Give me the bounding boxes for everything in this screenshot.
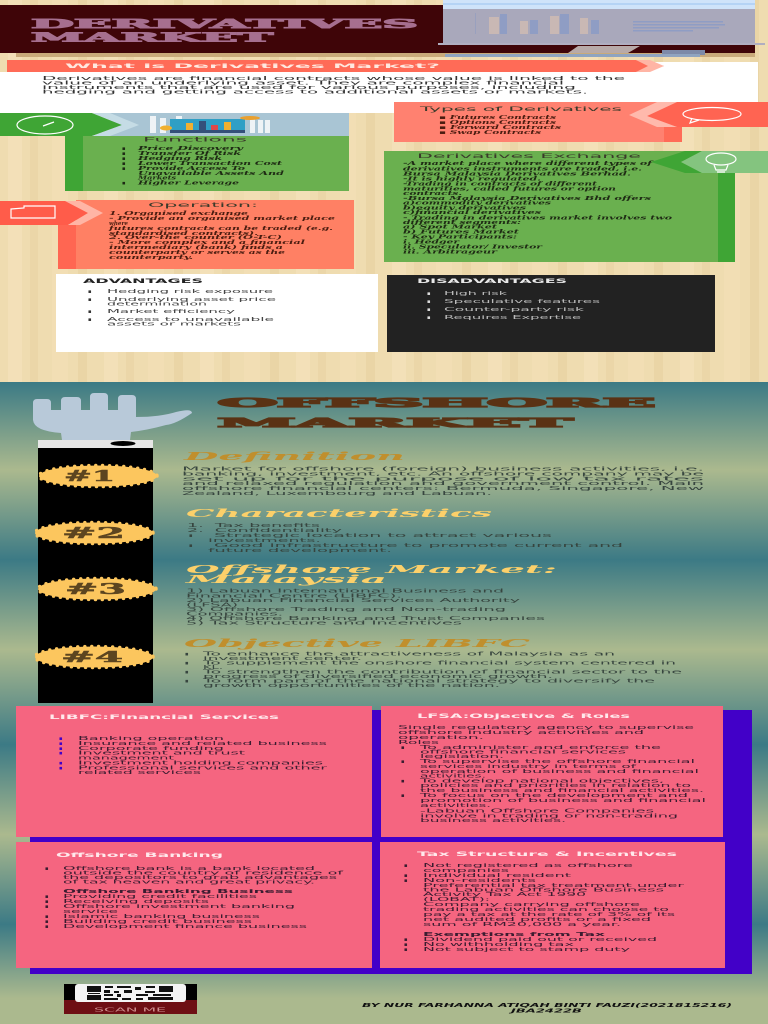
list: Hedging risk exposure [107,289,273,295]
list: To supplement the onshore financial system centered in [200,661,676,667]
panel: types of derivatives [394,102,768,142]
list: investment center. [203,656,363,662]
body text: ▪ [45,914,49,920]
body text: ▪ [45,904,49,910]
list: High risk [444,291,507,297]
list: Markets [136,176,176,182]
list: 4) Offshore Banking and Trust Companies [186,616,546,622]
list: ▪ [122,146,126,152]
body text: Dividend paid out or received [423,937,657,943]
body text: ii. Speculator/ Investor [403,245,545,251]
scan me label: SCAN ME [94,1008,166,1014]
list: related services [78,770,202,776]
heading: Malaysia [182,572,387,586]
title text: DERIVATIVES [31,16,418,31]
list: Good infrastructure to promote current and [214,543,623,549]
list: ▪ [88,289,92,295]
body text: 2. Over-the counter (O-T-C) [107,234,283,241]
body text: Providing credit facilities [63,894,258,900]
body text: Bursa Malaysia Derivatives Berhad. [401,171,631,177]
header arrow [0,113,122,136]
body text: outside the country of residence of [63,870,344,876]
body text: ▪ [404,878,408,884]
body text: the Labuan Offshore Business [423,888,665,894]
panel: offshore banking [16,842,372,968]
cuff button [110,441,136,446]
body text: Single regulatory agency to supervise [398,725,694,731]
body text: sum of RM20,000 a year. [423,922,622,928]
list: growth opportunities of the nation. [203,683,501,689]
body text: ▪ [404,947,408,953]
light arrow accent [65,201,103,225]
badge #3 [38,578,156,600]
list: To strengthen the contribution of financial sector to the [200,670,682,676]
list: Unavailable Assets And [138,171,285,177]
list [427,291,601,321]
body text: and relaxed regulation and government control. Main [182,481,704,487]
heading: Offshore Banking [56,851,224,859]
body text: Offshore Banking Business [63,889,293,895]
list: 2. Confidentiality [187,528,342,534]
author credit [362,1003,732,1014]
body text: where [109,221,129,227]
body text: Market for offshore (foreign) business activities, i.e. [182,466,705,472]
list: To form part of the national strategy to diversify the [200,679,655,685]
purple backing frame [30,710,752,974]
body text [398,725,706,824]
body text: -Labuan Offshore Companies [420,808,655,814]
list: Banking operation [78,736,224,742]
list: ▪ Swap Contracts [439,130,541,136]
panel: advantages [56,274,378,352]
body text: ▪ [45,894,49,900]
light arrow accent [629,102,677,127]
body text: -Trading in contracts of different [403,181,598,187]
body text: business activities. [420,818,567,824]
body text: c)financial derivatives [403,209,541,216]
list: management [78,756,174,762]
body text: Not subject to stamp duty [423,947,630,953]
panel: what is derivatives market [0,60,758,113]
body text: operation. [398,735,485,741]
body text: No withholding tax [423,942,574,948]
list [187,523,623,554]
list: ▪ [185,661,189,667]
heading: Definition [181,449,405,463]
body text: - Trading in derivatives market involves two [403,215,673,221]
heading: LFSA:Objective & Roles [417,712,630,720]
body text: Building credit business [63,919,253,925]
list: ▪ [427,291,431,297]
list: ▪ [185,679,189,685]
list: Counter-party risk [444,307,584,313]
body text [182,466,707,497]
body text: counterparty. [109,255,193,261]
body text: ▪ [404,873,408,879]
heading: Functions [143,136,249,144]
heading: Offshore Market: [186,562,557,576]
body text: net audited profits or a fixed [423,917,651,923]
body text: Roles [398,740,440,746]
body text: banking, investment, etc. An offshore company may be [182,472,704,478]
list: Lower Transaction Cost [136,161,283,167]
body text [401,161,673,255]
list: ▪ [122,156,126,162]
panel: LIBFC financial services [16,706,372,837]
list: ▪ Options Contracts [439,120,556,126]
list: ▪ [88,297,92,303]
body text: involve in trading or non-trading [420,814,678,820]
body text: To focus on the development and [417,793,688,799]
body text: To administer and enforce the [417,745,661,751]
body text: ▪ [45,899,49,905]
list: 2) Labuan Financial Services Authority [186,598,520,604]
body text [404,863,687,953]
body text: Company carrying offshore [423,902,640,908]
body text: Preferential tax treatment under [423,883,687,889]
title: offshore market: MARKET [218,415,576,430]
body text [107,211,336,261]
list: Price Discovery [136,146,245,152]
gradient background: offshore section [0,382,768,1024]
heading: DISADVANTAGES [417,277,568,285]
heading [182,562,557,586]
body text: b) Futures Market [403,228,520,235]
body text: Not registered as offshore [423,863,633,869]
intro paragraph: hedging and getting access to additional assets or markets. [42,90,589,96]
list: Corporate funding [78,746,224,752]
list: ▪ Futures Contracts [439,115,556,121]
list: 5) Tax Structure and Incentives [186,620,463,626]
list: Requires Expertise [444,315,581,321]
heading: LIBFC:Financial Services [49,713,279,721]
illustration: finance dashboard [150,116,270,133]
list [59,736,330,776]
body text: ▪ [45,924,49,930]
heading: Derivatives Exchange [417,152,641,160]
body text: services industry in terms of [420,764,636,770]
body text: futures contracts can be traded (e.g. [107,225,333,232]
body text: Non-residents [423,878,537,884]
intro paragraph: value of an underlying asset. They are complex financial [42,80,564,86]
list: progress of diversified economic growth. [203,674,554,680]
badge #3: #3 [65,580,126,598]
title: offshore market [218,395,655,430]
badge #2 [35,522,153,544]
section: definition [181,449,707,497]
body text: standardised contracts). [109,230,258,237]
ribbon heading [7,60,664,72]
list: Higher Leverage [136,180,240,186]
body text: - More complex and a financial [109,240,305,246]
title: offshore market: OFFSHORE [218,395,655,410]
section: characteristics [186,506,623,554]
list [186,589,546,626]
panel: LFSA objective and roles [381,706,723,837]
body text: - Provide an organised market place [109,216,336,222]
badge #2: #2 [62,524,125,542]
body text: the depositors to grab advantages [63,875,338,881]
list: ▪ [122,161,126,167]
title banner: derivatives market [0,5,755,57]
list: Access to unavailable [107,317,274,323]
list: ▪ [122,151,126,157]
list: ▪ [189,543,193,549]
panel: functions [0,113,349,191]
list [88,289,276,328]
heading: Tax Structure & Incentives [417,850,678,858]
list: investments. [208,538,322,544]
author credit: JBA2422B [508,1008,582,1014]
panel: disadvantages [387,275,715,352]
body text: of tax heaven and great privacy. [63,880,316,886]
body text: intermediary (bank) finds a [109,244,283,251]
body text: Exemptions from Tax [423,932,607,938]
list: Insurance and related business [78,741,328,747]
body text: offshore financial centers: Bermuda, Singapore, New [182,486,707,492]
list: (LFSA) [186,602,238,608]
list: ▪ [59,760,63,766]
list: ▪ [59,736,63,742]
list: ▪ [88,309,92,315]
body text: Offshore investment banking [63,904,295,910]
body text: Offshore bank is a bank located [63,866,315,872]
list: KL. [203,665,224,671]
list: Strategic location to attract various [214,533,553,539]
header illustration: presentation board [438,0,765,57]
body text: policies and priorities in relation to [420,783,691,789]
body text [45,866,344,930]
icon: hand [33,393,192,440]
list: Investment and trust [78,751,245,757]
list: ▪ [427,299,431,305]
body text: offshore industry activities and [398,730,644,736]
body text: i. Hedger [403,239,462,245]
cuff [38,440,153,448]
wood background: derivatives section [0,0,768,382]
body text: Development finance business [63,924,308,930]
intro paragraph: Derivatives are financial contracts whose value is linked to the [42,76,625,82]
list: Underlying asset price [107,297,276,303]
list: ▪ [59,746,63,752]
title text [31,16,418,44]
icon: speech bubble [683,108,741,123]
list: ▪ [185,652,189,658]
list: ▪ [59,766,63,772]
body text: Individual resident [423,873,571,879]
icon: light bulb [706,153,736,172]
list: 1. Tax benefits [187,523,321,529]
body text: Zealand, Luxembourg and Labuan. [182,491,493,497]
body text: Receiving deposits [63,899,210,905]
body text: ▪ [401,745,405,751]
list: 3) Offshore Trading and Non-trading [186,607,506,613]
author credit: BY NUR FARHANNA ATIQAH BINTI FAUZI(2021815216) [362,1003,732,1009]
list: ▪ [122,166,126,172]
body text: -Bursa Malaysia Derivatives Bhd offers [403,196,651,202]
header arrow [0,201,88,225]
sleeve [38,447,153,703]
list: Hedging Risk [136,156,223,162]
body text: set up for the purpose of low tax rates [182,476,705,482]
list: ▪ [427,307,431,313]
list: Market efficiency [107,309,235,315]
body text: maturities, called futures or option [403,186,616,192]
list: 1) Labuan International Business and [186,589,504,595]
panel: operation [0,200,354,269]
body text: ▪ [401,778,405,784]
icon: clock [17,116,73,134]
panel: tax structure and incentives [380,842,725,968]
intro paragraph: instruments that are used for various purposes, including [42,85,576,91]
body text: ▪ [404,942,408,948]
title text: MARKET [31,30,276,44]
body text: derivatives instruments are traded, i.e. [403,167,642,173]
body text: trading activities can choose to [423,907,669,913]
list: ▪ Forward Contracts [439,125,561,131]
badge #1 [39,466,157,486]
heading: Characteristics [186,506,494,520]
body text: counterparty or serves as the [109,250,286,256]
section: objective LIBFC [184,636,682,689]
list: Investment holding companies [78,760,324,766]
body text: ▪ [45,866,49,872]
body text: contracts. [403,191,462,197]
body text: operation of business and financial [420,769,699,775]
header arrow [651,151,702,173]
list [122,146,285,186]
body text: legislation. [420,754,505,760]
body text: ▪ [404,937,408,943]
intro paragraph [42,76,625,96]
heading: Objective LIBFC [184,636,533,650]
body text: offshore financial services [420,750,627,756]
light green tab [681,151,768,173]
heading: Types of Derivatives [417,105,624,113]
timeline: raised hand with numbered sleeve [33,393,192,703]
body text: companies [423,868,510,874]
body text: different segments: [403,220,521,226]
list: Transfer Of Risk [138,151,242,157]
body text: ▪ [45,919,49,925]
list: ▪ [122,180,126,186]
body text: ▪ [401,759,405,765]
body text: ▪ [401,793,405,799]
panel: derivatives exchange [384,151,768,262]
list: Companies. [186,611,284,617]
body text: To develop national objectives, [417,778,665,784]
light arrow accent [92,113,139,136]
body text: ▪ [404,863,408,869]
body text: b)equity derivatives [403,204,526,211]
list: ▪ [185,670,189,676]
list: Financial Centre (LIBFC). [186,593,403,599]
list: assets or markets [107,322,242,328]
body text: a)commodity derivatives [403,200,551,207]
badge #1: #1 [64,467,115,485]
header arrow [647,102,768,127]
list [185,652,682,689]
body text: activities. [420,803,492,809]
body text: activities. [420,774,487,780]
badge #4 [35,646,153,668]
list: ▪ [189,533,193,539]
body text: To supervise the offshore financial [417,759,695,765]
section: offshore market Malaysia [182,562,557,626]
QR code card: scan me [64,984,197,1014]
body text: the business and financial activities. [420,788,705,794]
badge #4: #4 [61,648,123,666]
list: ▪ [59,751,63,757]
list: ▪ [427,315,431,321]
list: Provide Access To [136,166,246,172]
body text: (LOBAT): [423,897,491,903]
body text: Activity Tax Act 1990 [423,892,586,898]
body text: -It is highly regulated. [403,176,541,182]
body text: pay a tax at the rate of 3% of its [423,912,676,918]
body text: 1. Organised exchange [109,211,249,217]
ribbon heading: What is Derivatives Market? [65,62,441,70]
icon: document [11,206,55,218]
list: ▪ [88,317,92,323]
body text: Islamic banking business [63,914,261,920]
heading: Operation: [148,201,258,209]
body text: service [63,909,118,915]
body text: promotion of business and financial [420,798,706,804]
body text: a) Spot Market [403,224,498,231]
list: Professional services and other [78,766,330,772]
body text: -A market place where different types of [403,161,654,167]
body text: - Key Participants: [403,235,517,241]
list: future development. [208,548,393,554]
list [439,115,561,136]
QR code pattern [87,986,173,1000]
heading: ADVANTAGES [83,277,204,285]
list: ▪ [59,741,63,747]
body text: iii. Arbitrageur [403,249,500,255]
list: determination [107,302,207,308]
list: Speculative features [444,299,601,305]
list: To enhance the attractiveness of Malaysia as an [200,652,615,658]
